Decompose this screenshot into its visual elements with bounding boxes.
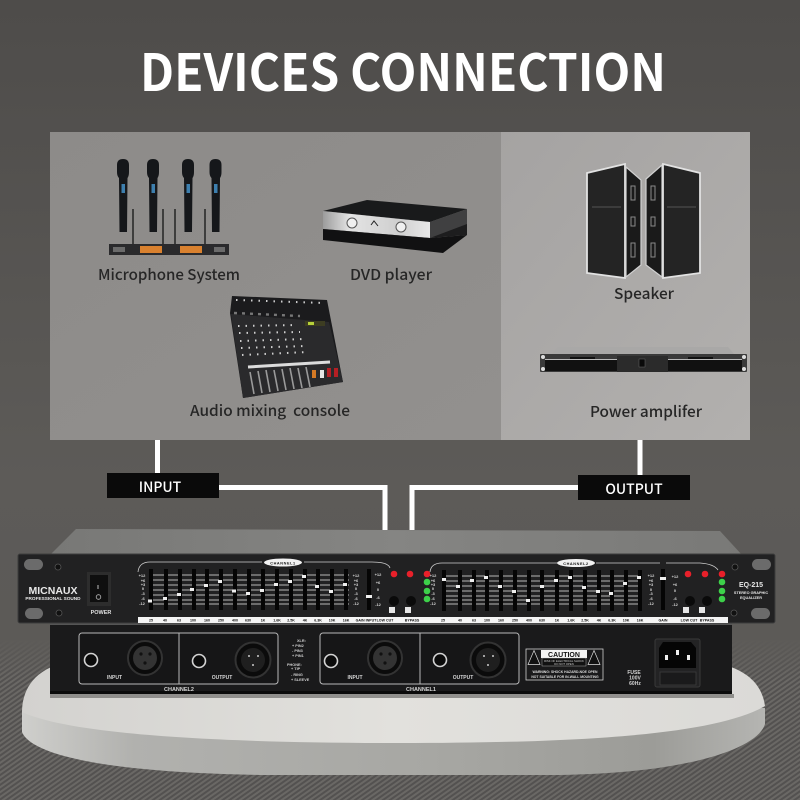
wiring legend [287,639,310,682]
channel 1 faders: +12 [353,573,360,578]
channel 1 faders: +3 [354,582,359,587]
frequency label strip: 400 [232,618,238,622]
title: DEVICES CONNECTION [140,32,666,106]
wiring legend: XLR: [297,639,306,643]
channel 1 faders: 0 [142,586,145,591]
frequency label strip: 63 [177,618,181,622]
channel 2 faders: +12 [648,573,655,578]
channel 1 faders: -3 [354,591,359,596]
display platform [22,664,765,775]
frequency label strip: LOW CUT [681,618,698,622]
icon: power amplifier [540,347,747,372]
gain and level markings: -6 [673,596,678,601]
channel 2 bracket [430,559,718,572]
wiring legend: + SLEEVE [291,678,310,682]
gain sliders [366,569,666,610]
model label: STEREO GRAPHIC [734,591,768,595]
channel 2 faders: +6 [649,578,654,583]
channel 2 faders: -3 [649,591,654,596]
channel 2 connector panel: INPUT [107,675,122,681]
frequency label strip: 630 [245,618,251,622]
panel: output devices [501,132,750,440]
power socket [655,639,700,687]
frequency label strip: 4K [303,618,308,622]
icon: speaker pair [587,164,700,278]
power label: POWER [91,610,111,616]
channel 1 faders: -12 [139,601,146,606]
model label [734,582,768,600]
label: DVD player: DVD player [350,264,433,285]
gain and level markings: +6 [673,582,678,587]
channel 1 connector panel: OUTPUT [453,675,473,681]
frequency label strip: GAIN INPUT [356,618,377,622]
wiring legend: + TIP [291,667,301,671]
fuse label: 100V [629,676,641,682]
rear panel of equalizer [50,623,732,694]
channel 2 faders: 0 [432,586,435,591]
label: Audio mixing console: Audio mixing console [190,400,350,421]
channel 1 connector panel: INPUT [348,675,362,681]
channel 1 faders: -3 [141,591,146,596]
icon: DVD player [323,200,467,253]
channel 2 faders: 0 [650,587,653,592]
frequency label strip: 250 [512,618,518,622]
caution label [526,649,603,680]
channel 1 bracket: CHANNEL1 [270,562,296,566]
frequency label strip: 40 [458,618,462,622]
frequency label strip: 63 [472,618,476,622]
gain and level markings: +12 [672,574,679,579]
channel 2 faders [430,570,655,611]
channel 2 faders: +3 [649,582,654,587]
channel 2 label: CHANNEL2 [164,687,194,693]
gain and level markings: +12 [375,572,382,577]
arrow: input connection line [158,440,385,530]
gain and level markings: 0 [674,588,677,593]
frequency label strip: 630 [539,618,545,622]
channel 2 bracket: CHANNEL2 [563,562,589,566]
knobs and push buttons [389,596,712,613]
channel 1 label: CHANNEL1 [406,687,436,693]
channel 1 faders: +12 [139,573,146,578]
frequency label strip [138,617,728,623]
frequency label strip: LOW CUT [377,618,394,622]
caution label: NOT SUITABLE FOR IN-WALL MOUNTING [531,675,599,679]
frequency label strip: 2.5K [287,618,295,622]
wiring legend: - PIN3 [292,649,303,653]
wiring legend: PHONE: [287,663,302,667]
wiring legend: + PIN2 [292,644,304,648]
frequency label strip: 250 [218,618,224,622]
fuse label [627,670,641,687]
caution label: RISK OF ELECTRICAL SHOCK [544,659,584,663]
frequency label strip: 10K [623,618,630,622]
label: OUTPUT [578,475,690,500]
channel 1 faders: -12 [353,601,360,606]
label: INPUT: INPUT [139,477,182,497]
brand logo: PROFESSIONAL SOUND [25,596,81,601]
channel 2 faders: -6 [649,596,654,601]
caution label: CAUTION [548,652,580,659]
frequency label strip: BYPASS [700,618,715,622]
frequency label strip: GAIN [659,618,668,622]
frequency label strip: 16K [637,618,644,622]
icon: audio mixing console [230,296,343,398]
channel 2 faders: -12 [648,601,655,606]
panel: input devices [50,132,501,440]
frequency label strip: 160 [498,618,504,622]
floor fade [0,640,800,680]
frequency label strip: 40 [163,618,167,622]
model label: EQ-215 [739,582,763,589]
frequency label strip: 2.5K [581,618,589,622]
channel 1 faders: +6 [354,578,359,583]
wiring legend: - RING [291,673,303,677]
frequency label strip: 1.6K [567,618,575,622]
channel 2 faders: -3 [431,591,436,596]
frequency label strip: 6.3K [608,618,616,622]
model label: EQUALIZER [740,596,762,600]
frequency label strip: BYPASS [405,618,420,622]
channel 1 connector panel [320,633,519,684]
brand logo [25,585,81,601]
label: Microphone System: Microphone System [98,264,240,285]
frequency label strip: 25 [441,618,445,622]
arrow: output connection line [412,440,640,530]
frequency label strip: 1K [261,618,266,622]
channel 1 faders: +3 [141,582,146,587]
channel 2 faders: +6 [431,578,436,583]
label: OUTPUT: OUTPUT [605,479,663,499]
icon: wireless microphones and receiver [109,159,229,255]
channel 1 faders: +6 [141,578,146,583]
frequency label strip: 16K [343,618,350,622]
frequency label strip: 4K [597,618,602,622]
channel 1 faders: 0 [355,586,358,591]
label: Speaker: Speaker [614,283,675,304]
label: Power amplifer: Power amplifer [590,401,703,422]
gain and level markings: +6 [376,580,381,585]
rack ears [24,559,771,619]
channel 1 bracket [138,558,390,572]
power switch [87,572,111,606]
screws [55,564,738,616]
wiring legend: + PIN1 [292,654,304,658]
front panel of equalizer [18,554,775,623]
caution label: DO NOT OPEN [554,662,574,666]
channel 1 faders: -6 [354,596,359,601]
frequency label strip: 400 [526,618,532,622]
frequency label strip: 1.6K [273,618,281,622]
channel 2 faders: -12 [430,601,437,606]
fuse label: 60Hz [629,681,641,687]
frequency label strip: 100 [190,618,196,622]
channel 1 faders: -6 [141,596,146,601]
channel 2 faders: -6 [431,596,436,601]
device top cover [50,529,742,555]
caution label: WARNING: SHOCK HAZARD-NOE OPEN [532,670,598,674]
channel 2 faders: +12 [430,573,437,578]
gain and level markings: -12 [375,602,382,607]
gain and level markings: -12 [672,602,679,607]
floor texture [0,640,800,800]
frequency label strip: 6.3K [314,618,322,622]
channel 2 connector panel [79,633,278,684]
gain and level markings: -6 [376,595,381,600]
fuse label: FUSE [627,670,641,676]
frequency label strip: 10K [329,618,336,622]
gain and level markings [375,572,679,607]
channel 1 faders [139,569,360,610]
gain and level markings: 0 [377,587,380,592]
brand logo: MICNAUX [28,585,78,597]
frequency label strip: 1K [555,618,560,622]
label: INPUT [107,473,219,498]
frequency label strip: 100 [484,618,490,622]
channel 2 faders: +3 [431,582,436,587]
LED indicators [391,571,725,602]
frequency label strip: 25 [149,618,153,622]
channel 2 connector panel: OUTPUT [212,675,232,681]
frequency label strip: 160 [204,618,210,622]
